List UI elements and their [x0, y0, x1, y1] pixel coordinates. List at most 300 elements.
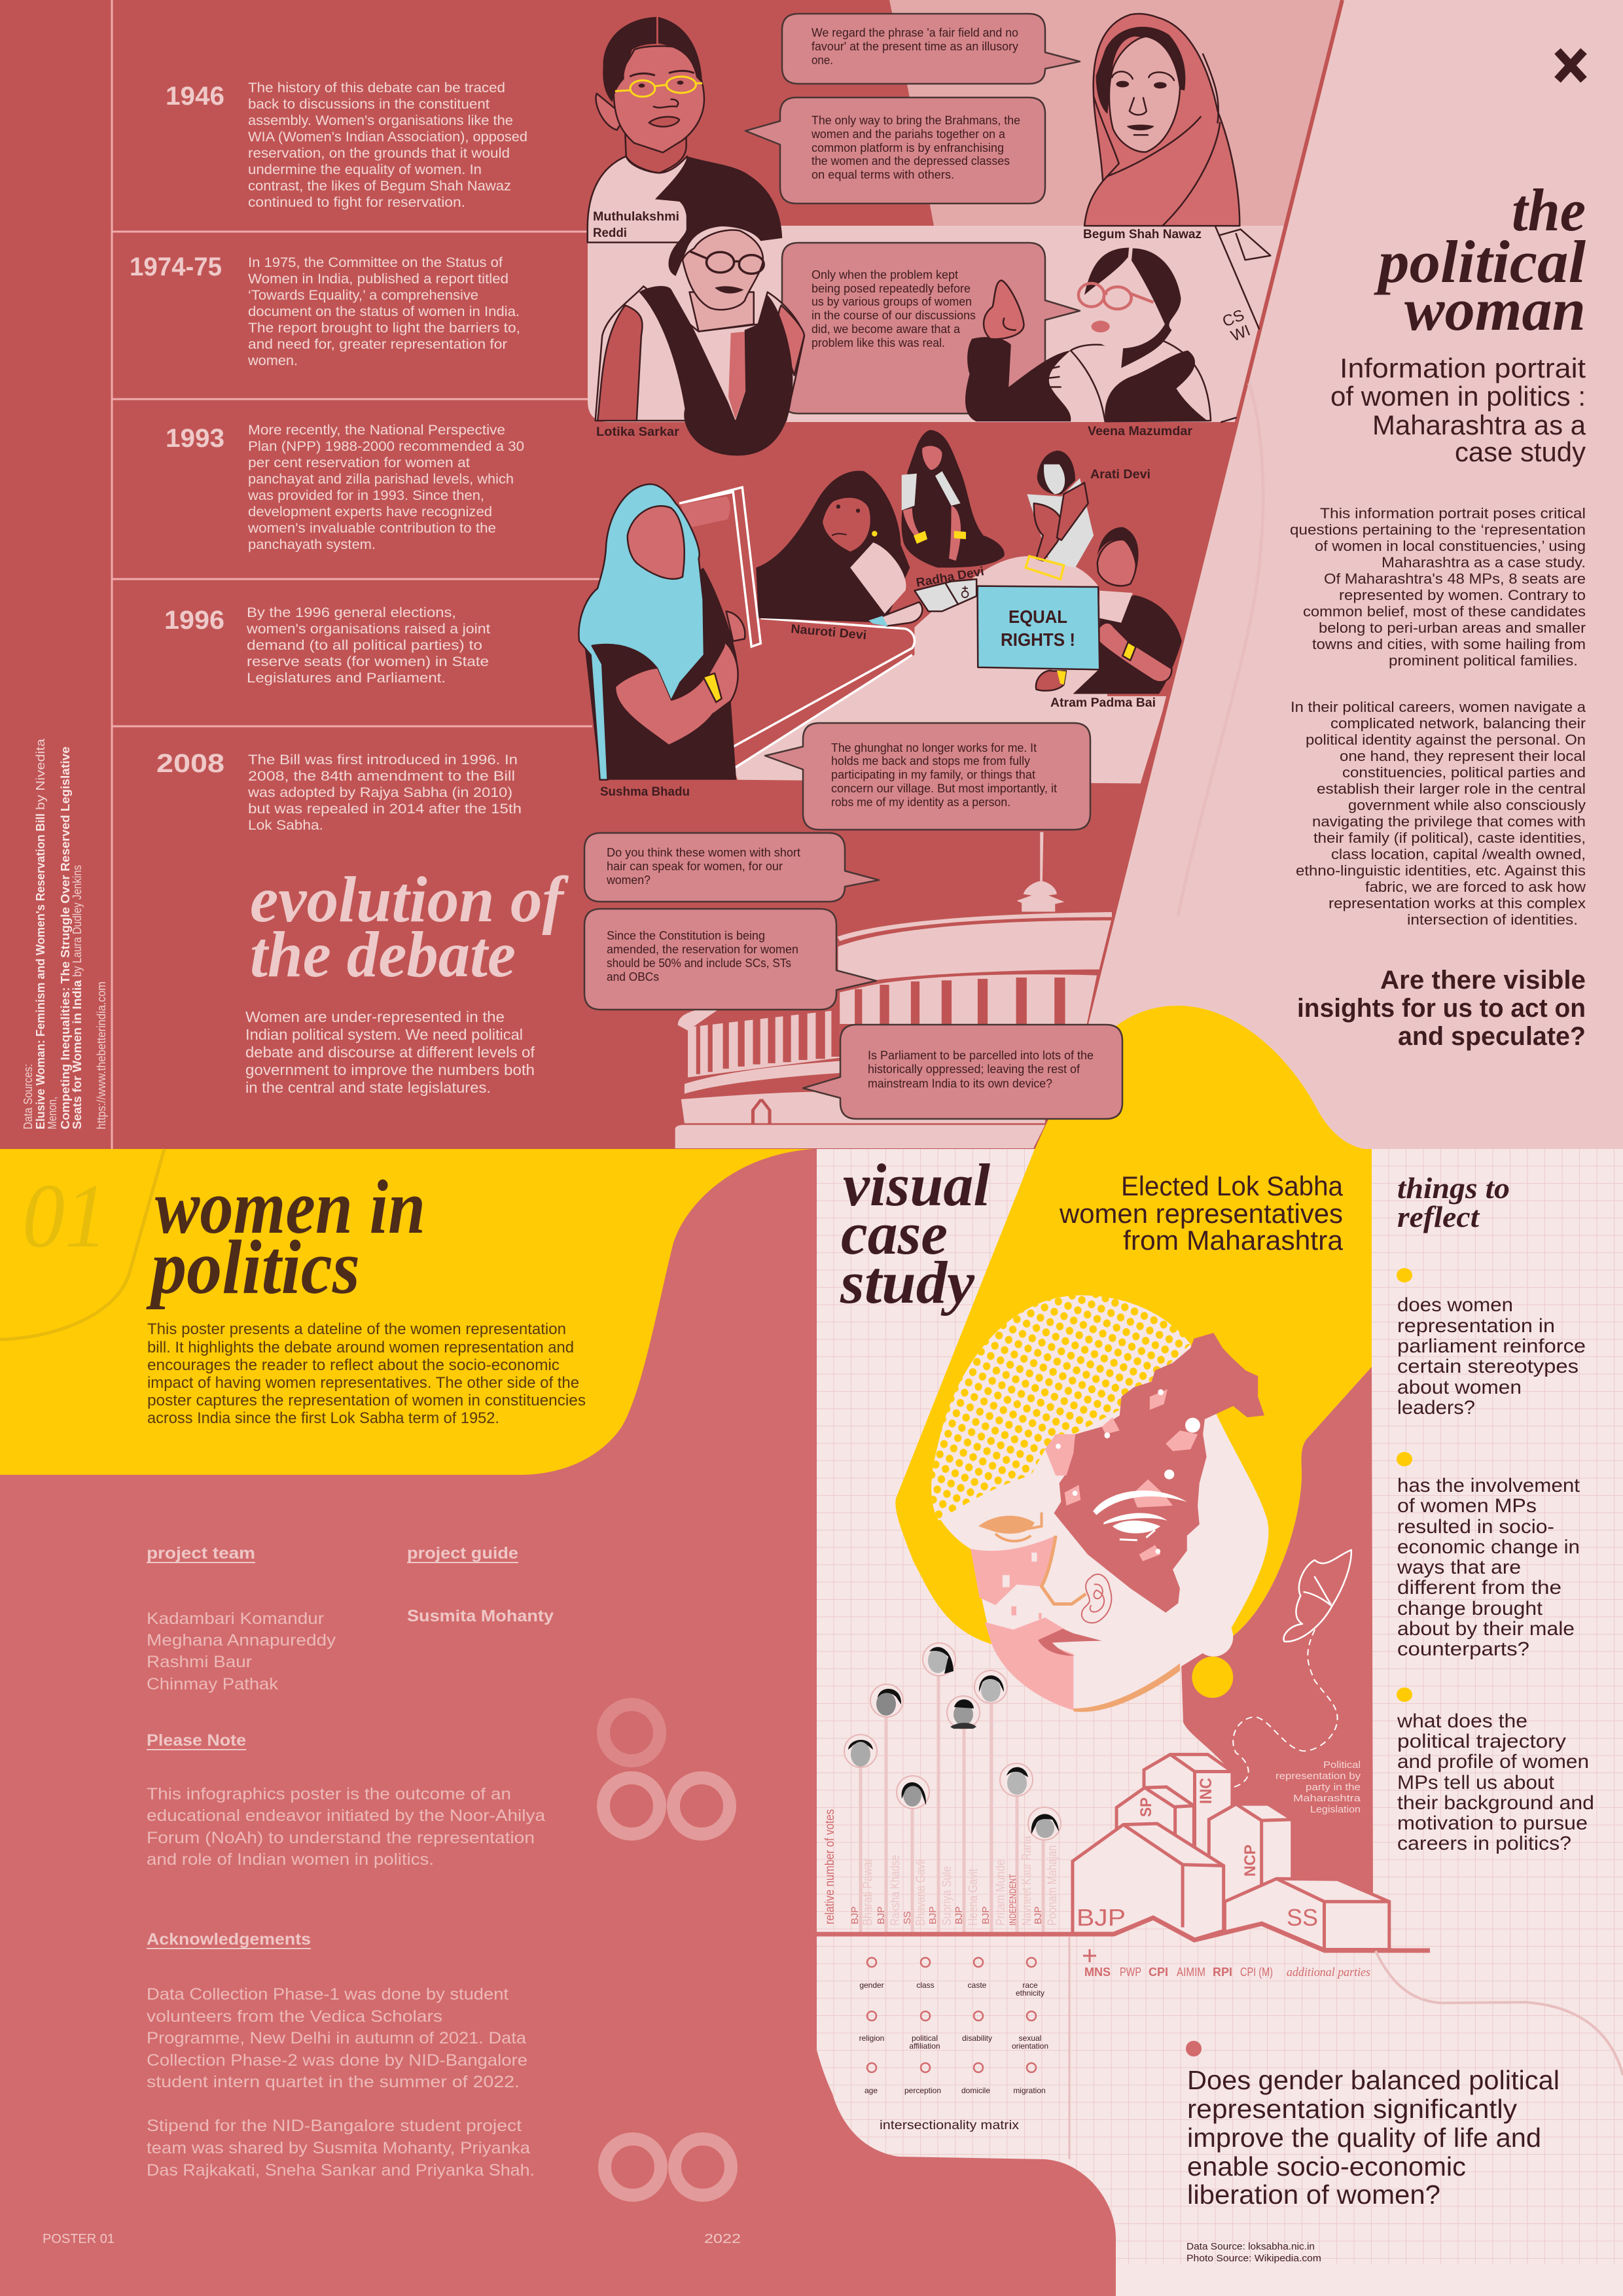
data sources vertical text: by Laura Dudley Jenkins: [71, 865, 84, 977]
timeline entry: 1993: panchayat and zilla parishad levels, which: [248, 472, 514, 487]
timeline entry: 1946: continued to fight for reservation.: [248, 195, 465, 210]
bubble 4: robs me of my identity as a person.: [831, 796, 1010, 809]
chart: vertical labels: INDEPENDENT: [1007, 1874, 1018, 1926]
reflection 2: change brought: [1397, 1598, 1543, 1619]
data sources vertical text: https://www.thebetterindia.com: [95, 981, 108, 1129]
callout: central question: Does gender balanced political: [1187, 2065, 1560, 2095]
bubble 3: Only when the problem kept: [812, 268, 958, 281]
timeline entry: 1974-75: [130, 253, 520, 368]
label: CSWI on the document: WI: [1228, 322, 1253, 345]
heading: women in politics: politics: [146, 1224, 360, 1310]
background: meeting table area: [733, 556, 1167, 783]
text: project team: [147, 1544, 336, 1693]
title: the political woman: political: [1374, 228, 1586, 295]
table outline: [733, 618, 914, 768]
subtitle: [1330, 353, 1586, 467]
label: political representation: Political: [1323, 1759, 1361, 1771]
intersectionality matrix: [859, 1958, 1048, 2132]
heading: things to reflect: reflect: [1397, 1200, 1480, 1233]
bubble 3: [782, 243, 1080, 414]
text: acknowledgements: Collection Phase-2 was done by NID-Bangalore: [147, 2051, 527, 2070]
chart: vertical labels: Raksha Khadse: [889, 1855, 902, 1926]
chart: vertical labels: Bhavana Gavli: [914, 1860, 928, 1926]
quote bubbles: [584, 14, 1122, 1119]
Maharashtra map: [1045, 1333, 1264, 1613]
intersectionality matrix: political: [912, 2034, 938, 2043]
text: please note: and role of Indian women in politics.: [147, 1850, 434, 1869]
data sources vertical text: Competing Inequalities: The Struggle Over Reserved Legislative: [59, 747, 72, 1129]
bubble 4: concern our village. But most importantly, it: [831, 782, 1057, 795]
party labels on houses: INC: [1197, 1778, 1215, 1804]
text: project guide: Susmita Mohanty: [407, 1607, 554, 1625]
bubble 2: the women and the depressed classes: [812, 154, 1010, 168]
figure: Radha Devi: [901, 430, 1005, 568]
heading: visual case study: case: [841, 1200, 948, 1267]
party labels on houses: [1077, 1778, 1318, 1931]
text: intro paragraph 2: navigating the privilege that comes with: [1312, 813, 1586, 830]
jaw line: [1073, 1663, 1180, 1712]
text: poster description: bill. It highlights the debate around women representation and: [147, 1339, 574, 1356]
heading: visual case study: [840, 1152, 990, 1316]
text: intro paragraph 2: constituencies, political parties and: [1342, 764, 1586, 781]
text: acknowledgements: Programme, New Delhi in autumn of 2021. Data: [147, 2029, 526, 2047]
additional parties: AIMIM: [1177, 1966, 1205, 1979]
sign: Equal Rights: [978, 586, 1099, 669]
chart: vertical labels: BJP: [876, 1906, 887, 1924]
timeline entry: 1974-75: document on the status of women in India.: [248, 304, 520, 319]
left eye: [978, 1512, 1042, 1541]
bubble 6: Since the Constitution is being: [607, 929, 765, 942]
timeline entry: 1993: was provided for in 1993. Since then,: [247, 488, 484, 503]
timeline entry: 1993: panchayath system.: [248, 537, 376, 552]
callout: central question: enable socio-economic: [1187, 2151, 1466, 2181]
timeline entry: 1974-75: and need for, greater representation for: [248, 337, 507, 352]
map pink districts: [1045, 1389, 1198, 1561]
timeline entry: 1993: development experts have recognized: [248, 504, 492, 520]
subtitle: Maharashtra as a: [1372, 410, 1586, 440]
portrait: Lotika Sarkar: [596, 156, 804, 455]
callout: visible insights question: insights for us to act on: [1297, 994, 1586, 1023]
text: poster description: [147, 1320, 586, 1427]
timeline entry: 1993: women's invaluable contribution to the: [247, 521, 496, 536]
dot above the question: [1186, 2041, 1202, 2057]
timeline entry: 1993: per cent reservation for women at: [248, 455, 470, 470]
data sources vertical text: Data Sources:: [22, 1064, 35, 1129]
text: acknowledgements: volunteers from the Vedica Scholars: [147, 2007, 442, 2026]
pink cheek lower: [985, 1617, 1073, 1710]
text: under-representation note: [245, 1008, 535, 1096]
text: intro paragraph 1: of women in local constituencies,’ using: [1315, 538, 1586, 554]
text: poster description: across India since the first Lok Sabha term of 1952.: [147, 1409, 499, 1427]
reflection 1: about women: [1397, 1377, 1522, 1398]
timeline entry: 1946: 1946: [166, 82, 224, 111]
portrait: Veena Mazumdar: [965, 248, 1211, 421]
cheek flecks lower: [1011, 1606, 1042, 1619]
text: intro paragraph 2: [1291, 699, 1586, 928]
name labels: Arati Devi: [1090, 468, 1150, 482]
chart: vertical labels: SS: [902, 1911, 913, 1924]
text: acknowledgements: student intern quartet in the summer of 2022.: [147, 2073, 520, 2091]
cheek flecks: [1003, 1553, 1037, 1587]
sign text: RIGHTS !: [1001, 629, 1075, 650]
chart: vertical labels: Navneet Kaur Rana: [1020, 1836, 1034, 1926]
timeline entry: 2008: 2008: [156, 749, 224, 778]
text: intro paragraph 2: fabric, we are forced to ask how: [1365, 879, 1586, 895]
text: intro paragraph 1: common belief, most of these candidates: [1303, 603, 1586, 620]
bubble 5: hair can speak for women, for our: [607, 860, 783, 873]
reflection 3: [1397, 1687, 1594, 1854]
text: under-representation note: Women are under-represented in the: [245, 1008, 505, 1025]
figure: Nauroti Devi: [756, 471, 922, 626]
additional parties: additional parties: [1287, 1966, 1370, 1979]
heading: evolution of the debate: the debate: [250, 918, 516, 991]
timeline entry: 1974-75: The report brought to light the barriers to,: [248, 321, 520, 336]
timeline entry: 2008: 2008, the 84th amendment to the Bill: [248, 769, 515, 784]
text: under-representation note: debate and discourse at different levels of: [245, 1044, 535, 1061]
text: acknowledgements: Das Rajkakati, Sneha Sankar and Priyanka Shah.: [147, 2161, 535, 2180]
name labels: Atram Padma Bai: [1050, 696, 1156, 710]
title: the political woman: [1374, 177, 1586, 343]
reflection 3: what does the: [1397, 1710, 1527, 1732]
text: intro paragraph 1: towns and cities, with some hailing from: [1312, 636, 1586, 652]
baseline: [817, 1918, 1430, 1951]
chart: vertical labels: BJP: [849, 1906, 861, 1924]
callout: central question: liberation of women?: [1187, 2180, 1440, 2210]
party labels on houses: SP: [1137, 1797, 1155, 1817]
timeline entry: 1996: 1996: [164, 606, 224, 635]
figure: Arati Devi: [1026, 451, 1094, 579]
reflection 3: their background and: [1397, 1792, 1594, 1814]
intersectionality matrix: disability: [962, 2034, 992, 2043]
bubble 5: [584, 833, 879, 902]
text: acknowledgements: Stipend for the NID-Bangalore student project: [147, 2117, 522, 2135]
bubble 7: mainstream India to its own device?: [868, 1077, 1052, 1090]
callout: central question: [1187, 2065, 1560, 2210]
chart: vertical labels: Pritam Munde: [994, 1860, 1008, 1926]
yellow blob above the divide: [1035, 1006, 1372, 1150]
text: intro paragraph 1: prominent political families.: [1389, 652, 1578, 669]
dotted hair: [931, 1296, 1190, 1521]
subtitle: Elected Lok Sabha: Elected Lok Sabha: [1121, 1171, 1344, 1201]
name labels: Muthulakshmi: [593, 210, 679, 224]
timeline entry: 1996: women's organisations raised a joint: [246, 622, 490, 637]
additional parties: RPI: [1213, 1966, 1232, 1979]
house: NCP: [1209, 1804, 1293, 1907]
illustration: party houses: [1073, 1754, 1389, 1949]
timeline entry: 1996: [164, 605, 490, 686]
faint curve in right panel: [1178, 383, 1263, 915]
text: poster description: impact of having women representatives. The other side of the: [147, 1374, 579, 1392]
nose line: [1042, 1536, 1086, 1604]
reflection 1: parliament reinforce: [1397, 1335, 1586, 1357]
decorative rings: [603, 1704, 731, 2195]
heading: things to reflect: [1397, 1171, 1510, 1233]
reflection 2: [1397, 1452, 1580, 1660]
bubble 1: We regard the phrase 'a fair field and no: [812, 26, 1018, 39]
yellow backdrop behind the face: [895, 1149, 1372, 1644]
timeline entry: 2008: was adopted by Rajya Sabha (in 2010): [247, 785, 512, 800]
text: intro paragraph 1: represented by women. Contrary to: [1339, 587, 1586, 603]
subtitle: Elected Lok Sabha: women representatives: [1059, 1198, 1343, 1229]
reflection 3: MPs tell us about: [1397, 1772, 1555, 1793]
reflection 2: has the involvement: [1397, 1475, 1580, 1496]
title: the political woman: woman: [1404, 276, 1586, 343]
intersectionality matrix: migration: [1013, 2086, 1046, 2095]
panel: right introduction background: [1055, 0, 1623, 1150]
text: project team: Chinmay Pathak: [147, 1675, 279, 1693]
additional parties: PWP: [1120, 1966, 1141, 1979]
text: acknowledgements: [147, 1930, 535, 2180]
party labels on houses: BJP: [1077, 1904, 1126, 1931]
additional parties: [1083, 1949, 1370, 1979]
timeline entry: 1974-75: 1974-75: [130, 253, 222, 281]
heading: visual case study: visual: [843, 1152, 990, 1218]
diagonal divider: [1055, 0, 1342, 1150]
timeline entry: 1993: More recently, the National Perspective: [248, 423, 505, 438]
heading: evolution of the debate: evolution of: [250, 863, 569, 936]
name labels: Veena Mazumdar: [1088, 425, 1193, 438]
bubble 2: common platform is by enfranchising: [812, 141, 1004, 154]
earring: [1192, 1617, 1233, 1698]
background: quote band light pink: [889, 0, 1342, 226]
dashed flight path: [1233, 1629, 1338, 1787]
house: BJP: [1073, 1824, 1224, 1939]
bubble 4: holds me back and stops me from fully: [831, 754, 1030, 768]
sign text: EQUAL: [1008, 607, 1067, 627]
illustration: Parliament building: [675, 832, 1112, 1148]
text: intro paragraph 2: government while also consciously: [1348, 797, 1586, 813]
label: CSWI on the document: [1220, 306, 1253, 345]
background: lower coral panel: [0, 1149, 1623, 2296]
timeline entry: 1946: The history of this debate can be traced: [248, 80, 505, 96]
callout: central question: representation significantly: [1187, 2094, 1518, 2124]
chart: vertical labels: relative number of votes: [823, 1809, 837, 1924]
additional parties: MNS: [1084, 1966, 1111, 1979]
intersectionality matrix: ethnicity: [1016, 1988, 1044, 1998]
intersectionality matrix: intersectionality matrix: [880, 2119, 1020, 2132]
intersectionality matrix: perception: [904, 2086, 941, 2095]
intersectionality matrix: caste: [968, 1981, 987, 1990]
name labels: [593, 210, 1202, 799]
name labels: Lotika Sarkar: [596, 425, 680, 439]
bubble 6: and OBCs: [607, 970, 659, 983]
timeline entry: 1946: [166, 80, 527, 210]
text: please note: This infographics poster is the outcome of an: [147, 1785, 511, 1803]
bubble 7: Is Parliament to be parcelled into lots of the: [868, 1049, 1094, 1062]
timeline entry: 2008: but was repealed in 2014 after the 15th: [248, 802, 522, 817]
portrait: Muthulakshmi Reddi: [588, 17, 704, 243]
text: acknowledgements: Acknowledgements: [147, 1930, 311, 1949]
reflection 3: careers in politics?: [1397, 1833, 1571, 1854]
figure: Atram Padma Bai: [1036, 527, 1182, 694]
timeline entry: 1996: By the 1996 general elections,: [247, 605, 456, 620]
subtitle: case study: [1455, 436, 1586, 467]
text: project team: Rashmi Baur: [147, 1653, 252, 1671]
timeline entry: 1996: Legislatures and Parliament.: [247, 671, 446, 686]
subtitle: Elected Lok Sabha: from Maharashtra: [1123, 1225, 1344, 1256]
lips: [1038, 1629, 1102, 1656]
bubble 1: one.: [812, 54, 833, 67]
text: please note: Forum (NoAh) to understand the representation: [147, 1829, 535, 1847]
house: SS: [1224, 1879, 1389, 1949]
heading: women in politics: [146, 1164, 425, 1310]
footer labels: [43, 2232, 741, 2246]
bubble 2: on equal terms with others.: [812, 168, 954, 181]
panel: lower right pale grid page: [817, 1149, 1623, 2296]
timeline entry: 1946: undermine the equality of women. In: [248, 162, 482, 177]
text: intro paragraph 2: one hand, they represent their local: [1340, 748, 1586, 764]
footer labels: 2022: [704, 2232, 741, 2246]
title: the political woman: the: [1512, 177, 1586, 243]
bubble 1: favour' at the present time as an illusory: [812, 40, 1018, 53]
text: intro paragraph 2: representation works at this complex: [1329, 895, 1586, 911]
sources: [1186, 2241, 1321, 2264]
bubble 3: did, we become aware that a: [812, 323, 961, 336]
chart: vertical labels: BJP: [954, 1906, 965, 1924]
text: project team: Kadambari Komandur: [147, 1610, 324, 1628]
data sources vertical text: [22, 738, 108, 1129]
data sources vertical text: Seats for Women in India: [71, 980, 84, 1129]
text: intro paragraph 2: intersection of identities.: [1407, 911, 1578, 928]
intersectionality matrix: race: [1022, 1981, 1038, 1990]
right eye and brow: [1093, 1491, 1187, 1540]
additional parties: CPI (M): [1240, 1966, 1273, 1979]
text: project team: Meghana Annapureddy: [147, 1631, 336, 1650]
chart: vertical labels: BJP: [927, 1906, 938, 1924]
timeline entry: 1946: assembly. Women's organisations like the: [248, 113, 513, 128]
reflection 1: leaders?: [1397, 1397, 1475, 1419]
reflection 2: different from the: [1397, 1577, 1561, 1598]
heading: evolution of the debate: [250, 863, 569, 991]
label: political representation: Maharashtra: [1293, 1793, 1361, 1804]
panel: yellow women in politics: [0, 1149, 813, 1475]
party labels on houses: NCP: [1241, 1845, 1259, 1877]
chart: vertical labels: Poonam Mahajan: [1046, 1845, 1060, 1926]
illustration: face portrait with Maharashtra map: [931, 1296, 1351, 1712]
name labels: Reddi: [593, 226, 627, 240]
pink cheek upper: [971, 1536, 1056, 1605]
bubble 2: women and the pariahs together on a: [811, 128, 1006, 141]
bubble 5: women?: [606, 874, 651, 887]
chart: MP portraits: [844, 1643, 1061, 1840]
text: intro paragraph 1: [1290, 505, 1586, 669]
heading: things to reflect: things to: [1397, 1171, 1510, 1205]
timeline entry: 1993: 1993: [166, 424, 224, 453]
coral shape behind face: [1181, 1367, 1373, 1893]
face base: [938, 1344, 1268, 1710]
sources: Data Source: loksabha.nic.in: [1186, 2241, 1315, 2252]
reflection 2: economic change in: [1397, 1536, 1580, 1558]
text: acknowledgements: Data Collection Phase-1 was done by student: [147, 1985, 508, 2004]
bubble 4: [765, 723, 1090, 830]
text: acknowledgements: team was shared by Susmita Mohanty, Priyanka: [147, 2139, 530, 2157]
text: intro paragraph 2: complicated network, balancing their: [1330, 715, 1586, 732]
data sources vertical text: Menon,: [46, 1097, 59, 1129]
portrait: Begum Shah Nawaz: [1084, 14, 1240, 226]
illustration: women's meeting scene: [579, 430, 1182, 780]
timeline entry: 1946: reservation, on the grounds that it would: [248, 146, 510, 161]
intersectionality matrix: domicile: [961, 2086, 990, 2095]
timeline entry: 1946: WIA (Women's Indian Association), opposed: [248, 130, 527, 145]
house: INC: [1144, 1754, 1232, 1869]
text: intro paragraph 1: Maharashtra as a case study.: [1382, 554, 1586, 571]
text: intro paragraph 1: questions pertaining to the ‘representation: [1290, 521, 1586, 538]
reflection 3: political trajectory: [1397, 1731, 1566, 1752]
bubble 5: Do you think these women with short: [607, 846, 800, 859]
timeline entry: 1993: Plan (NPP) 1988-2000 recommended a 30: [248, 439, 524, 454]
intersectionality matrix: age: [865, 2086, 878, 2095]
intersectionality matrix: class: [916, 1981, 935, 1990]
icon: open book: [914, 579, 976, 611]
timeline entry: 1974-75: In 1975, the Committee on the Status of: [248, 255, 503, 270]
intersectionality matrix: orientation: [1012, 2041, 1048, 2051]
text: poster description: poster captures the representation of women in constituencies: [147, 1392, 586, 1409]
reflection 1: does women: [1397, 1294, 1513, 1316]
label: political representation: Legislation: [1310, 1804, 1361, 1815]
reflection 2: ways that are: [1397, 1557, 1521, 1578]
illustration: portraits in the quote bands: [588, 14, 1270, 455]
icon: CSWI report document: [1215, 226, 1270, 422]
text: intro paragraph 2: establish their larger role in the central: [1317, 781, 1586, 797]
label: political representation: representation by: [1275, 1771, 1361, 1782]
bubble 3: in the course of our discussions: [812, 309, 976, 322]
reflection 2: resulted in socio-: [1397, 1516, 1554, 1538]
text: please note: Please Note: [147, 1731, 246, 1750]
data sources vertical text: by Nivedita: [34, 738, 47, 810]
bubble 3: us by various groups of women: [812, 295, 972, 308]
reflection 1: representation in: [1397, 1315, 1555, 1337]
icon: close cross: [1558, 51, 1584, 80]
text: intro paragraph 2: political identity against the personal. On: [1306, 732, 1586, 748]
timeline entry: 1996: reserve seats (for women) in State: [247, 654, 489, 669]
timeline entry: 1993: [166, 423, 524, 552]
text: please note: educational endeavor initiated by the Noor-Ahilya: [147, 1807, 545, 1825]
text: project team: project team: [147, 1544, 255, 1563]
chart: vertical labels: BJP: [1033, 1906, 1044, 1924]
text: under-representation note: government to improve the numbers both: [245, 1061, 535, 1078]
figure: Sushma Bhadu: [579, 484, 760, 780]
reflection 3: and profile of women: [1397, 1751, 1589, 1773]
name labels: Sushma Bhadu: [600, 785, 690, 799]
chart: vertical labels: BJP: [980, 1906, 991, 1924]
text: intro paragraph 1: belong to peri-urban areas and smaller: [1319, 620, 1586, 636]
intersectionality matrix: sexual: [1019, 2034, 1041, 2043]
reflection 1: [1397, 1268, 1586, 1419]
chart: vertical labels: Supriya Sule: [940, 1866, 954, 1926]
text: under-representation note: Indian political system. We need political: [245, 1026, 523, 1043]
timeline rules: [112, 0, 602, 1149]
number 01: 01: [22, 1165, 107, 1267]
data sources vertical text: Elusive Woman: Feminism and Women's Reservation Bill: [34, 813, 47, 1129]
house: SP: [1116, 1787, 1194, 1850]
bubble 7: [803, 1025, 1122, 1119]
text: poster description: encourages the reader to reflect about the socio-economic: [147, 1356, 560, 1374]
timeline entry: 2008: [156, 749, 522, 833]
timeline entry: 2008: Lok Sabha.: [248, 818, 323, 833]
bubble 3: problem like this was real.: [812, 336, 945, 349]
text: intro paragraph 2: their family (if political), caste identities,: [1313, 830, 1586, 846]
callout: central question: improve the quality of life and: [1187, 2123, 1541, 2153]
intersectionality matrix: affiliation: [909, 2041, 940, 2051]
name labels: Begum Shah Nawaz: [1083, 228, 1202, 241]
bubble 6: should be 50% and include SCs, STs: [607, 957, 791, 970]
text: intro paragraph 2: In their political careers, women navigate a: [1291, 699, 1586, 715]
nose ornament: [1082, 1574, 1111, 1623]
subtitle: Information portrait: [1340, 353, 1586, 383]
label: political representation: [1275, 1759, 1361, 1815]
reflection 2: counterparts?: [1397, 1638, 1529, 1660]
timeline entry: 1974-75: Women in India, published a report titled: [248, 272, 508, 287]
